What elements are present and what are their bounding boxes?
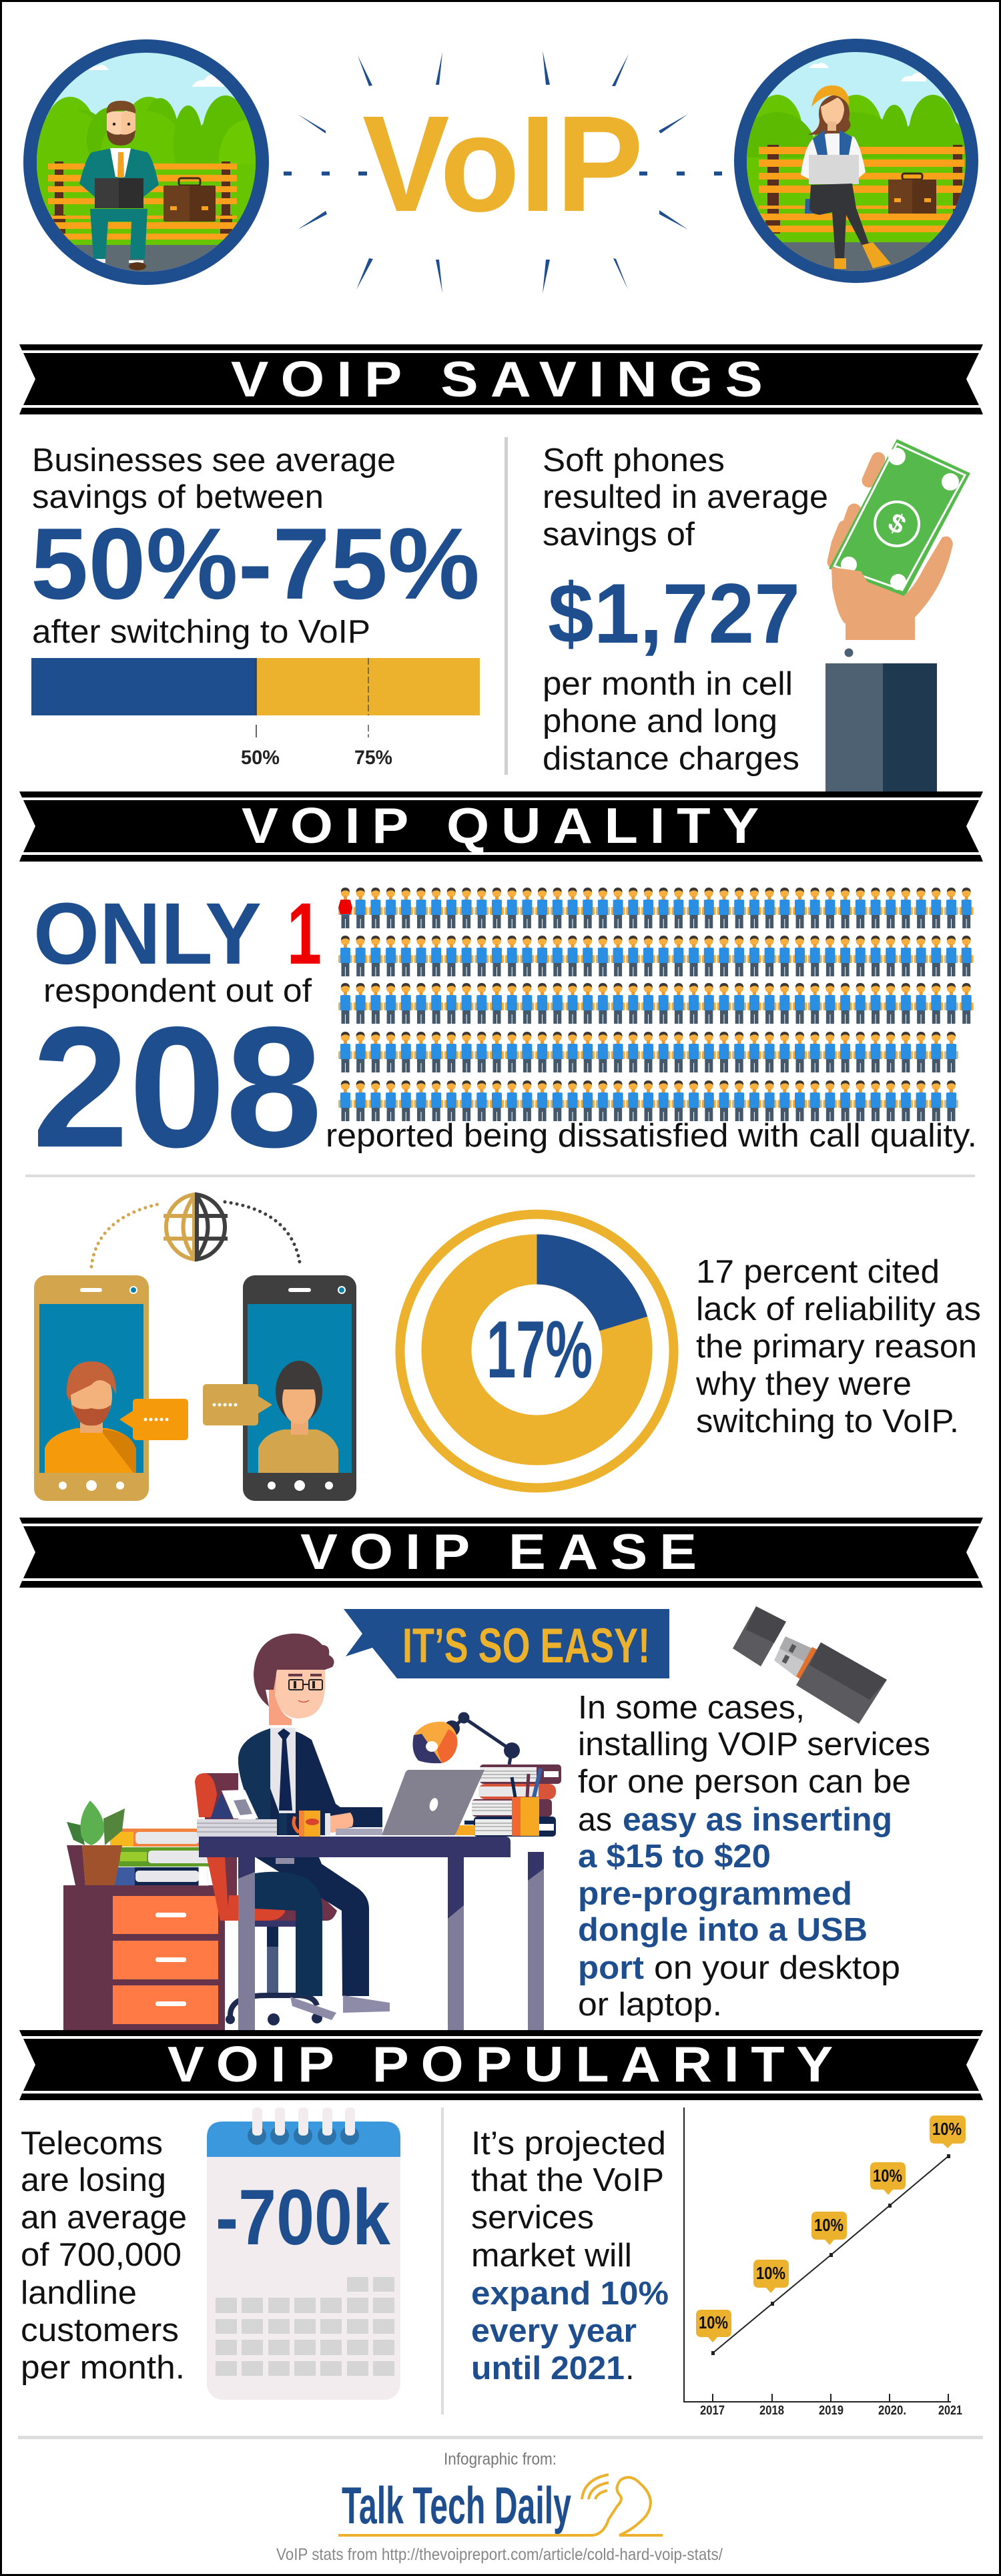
axis labels: 2019 — [819, 2404, 844, 2418]
axis labels: 2021 — [938, 2404, 962, 2418]
desk — [199, 1837, 544, 2030]
text block: installing VoIP: as — [578, 1802, 612, 1838]
icon: dotted arcs — [91, 1202, 300, 1267]
axis labels — [700, 2404, 962, 2418]
text block: reliability: 17 percent cited — [696, 1254, 940, 1290]
callouts: 10% — [696, 2116, 966, 2342]
text block: telecoms: Telecoms — [21, 2126, 163, 2162]
text block: per month — [543, 666, 799, 777]
text block: installing VoIP: installing VOIP services — [578, 1726, 930, 1762]
man — [238, 1634, 390, 2020]
text block: soft phones intro: Soft phones — [543, 442, 725, 478]
panel: savings percentage — [31, 442, 480, 769]
text block: telecoms: per month. — [21, 2350, 185, 2386]
pictogram: 208 respondents, one red — [338, 888, 974, 1121]
text block: businesses savings intro: Businesses see average — [32, 442, 396, 478]
heading: VoIP Quality — [19, 791, 983, 862]
line chart: 10% growth 2017-2021: 10% — [814, 2215, 844, 2235]
text block: telecoms: of 700,000 — [21, 2237, 182, 2273]
text block: telecoms: landline — [21, 2275, 137, 2311]
text block: soft phones intro — [543, 442, 828, 553]
text block: installing VoIP: dongle into a USB — [578, 1912, 868, 1948]
text block: reliability: switching to VoIP. — [696, 1403, 959, 1439]
heading: VoIP Popularity: VOIP POPULARITY — [168, 2036, 845, 2092]
icon: hand holding money — [825, 439, 970, 791]
text block: projection — [471, 2126, 669, 2386]
heading: VoIP Savings — [19, 344, 983, 414]
text block: projection: market will — [471, 2238, 632, 2274]
header — [20, 37, 984, 294]
text block: reliability: the primary reason — [696, 1329, 977, 1365]
text: respondent out of: respondent out of — [43, 973, 312, 1009]
text block: installing VoIP: port — [578, 1950, 644, 1986]
logo: Talk Tech Daily: Talk Tech Daily — [342, 2476, 571, 2535]
icon: woman on bench medallion — [731, 37, 984, 289]
line chart: 10% growth 2017-2021: 10% — [873, 2166, 902, 2186]
icon: man on bench medallion — [20, 39, 275, 292]
text block: installing VoIP: In some cases, — [578, 1690, 805, 1726]
icon: globe — [163, 1195, 228, 1259]
books — [110, 1829, 211, 1885]
desk items — [197, 1712, 561, 1837]
text block: soft phones intro: resulted in average — [543, 479, 828, 515]
plant — [67, 1801, 125, 1885]
burst rays — [284, 51, 722, 294]
text block: projection: every year — [471, 2313, 637, 2349]
text block: installing VoIP — [578, 1690, 930, 2023]
text block: installing VoIP: pre-programmed — [578, 1876, 852, 1912]
big text: only 1: ONLY — [33, 884, 262, 982]
text block: projection: It’s projected — [471, 2126, 666, 2162]
text block: telecoms: an average — [21, 2200, 187, 2236]
text block: reliability: lack of reliability as — [696, 1291, 981, 1327]
bar chart: savings range: 75% — [354, 747, 392, 769]
text block: installing VoIP: for one person can be — [578, 1764, 911, 1800]
icon: right phone — [243, 1275, 356, 1501]
heading: VoIP Quality: VOIP QUALITY — [242, 797, 771, 854]
big text: only 1: 1 — [287, 884, 322, 982]
text: source: VoIP stats from http://thevoipreport.com/article/cold-hard-voip-stats/ — [276, 2545, 723, 2564]
panel: call quality stat — [32, 884, 977, 1183]
big number: 208: 208 — [32, 990, 322, 1183]
heading: VoIP Savings: VOIP SAVINGS — [231, 351, 775, 407]
icon: left phone — [34, 1275, 149, 1501]
line chart: 10% growth 2017-2021: 10% — [756, 2263, 785, 2283]
bar chart: savings range: 50% — [241, 747, 280, 769]
big number: $1,727: $1,727 — [548, 566, 800, 661]
text block: reliability — [695, 1254, 981, 1439]
text block: soft phones intro: savings of — [543, 517, 695, 553]
line chart: 10% growth 2017-2021: 10% — [932, 2119, 962, 2139]
axis labels: 2018 — [759, 2404, 784, 2418]
bar chart: savings range — [31, 658, 480, 769]
panel: reliability — [34, 1195, 981, 1501]
text block: per month: phone and long — [543, 703, 777, 739]
panel: landline losses — [21, 2108, 400, 2400]
panel: market projection — [471, 2108, 966, 2418]
text block: telecoms: are losing — [21, 2162, 166, 2198]
icon: two phones connected by globe — [34, 1195, 356, 1501]
text block: projection: services — [471, 2200, 594, 2236]
icon: calendar with -700k: -700k — [216, 2174, 390, 2262]
heading: VoIP Popularity — [19, 2030, 983, 2100]
donut chart: 17%: 17% — [486, 1304, 593, 1395]
text block: projection: . — [625, 2350, 635, 2386]
text block: installing VoIP: easy as inserting — [623, 1802, 892, 1838]
text block: projection: expand 10% — [471, 2276, 669, 2312]
illustration: man at desk — [63, 1634, 561, 2030]
text block: per month: per month in cell — [543, 666, 793, 702]
footer — [276, 2450, 723, 2564]
text block: installing VoIP: or laptop. — [578, 1987, 722, 2023]
panel: ease of install — [63, 1606, 930, 2030]
text: reported being dissatisfied: reported being dissatisfied with call quality. — [326, 1118, 977, 1154]
text block: per month: distance charges — [543, 741, 799, 777]
chair — [195, 1773, 337, 2025]
text block: businesses savings intro — [32, 442, 396, 515]
line chart: 10% growth 2017-2021 — [684, 2108, 966, 2418]
text block: telecoms: customers — [21, 2312, 179, 2348]
icon: chat bubbles — [119, 1384, 272, 1440]
line chart: 10% growth 2017-2021: 10% — [699, 2312, 728, 2332]
title: VoIP — [362, 87, 643, 240]
icon: calendar with -700k — [207, 2108, 400, 2400]
text block: projection: that the VoIP — [471, 2162, 664, 2198]
text block: projection: until 2021 — [471, 2350, 625, 2386]
text block: telecoms — [21, 2126, 187, 2386]
text block: installing VoIP: a $15 to $20 — [578, 1839, 771, 1875]
heading: VoIP Ease — [19, 1518, 983, 1588]
text: infographic from: Infographic from: — [444, 2450, 557, 2469]
heading: VoIP Ease: VOIP EASE — [300, 1524, 709, 1580]
donut chart: 17% — [400, 1215, 674, 1488]
icon: hand holding money: $ — [884, 507, 910, 541]
icon: USB dongle — [733, 1606, 887, 1724]
speech bubble: it's so easy: IT’S SO EASY! — [402, 1619, 650, 1673]
text block: reliability: why they were — [695, 1366, 912, 1402]
panel: soft phone savings — [543, 439, 970, 791]
cabinet — [63, 1885, 225, 2030]
axis labels: 2020. — [878, 2404, 906, 2418]
big number: 50%-75%: 50%-75% — [31, 507, 480, 621]
speech bubble: it's so easy — [344, 1609, 669, 1678]
text: after switching: after switching to VoIP — [32, 614, 370, 650]
axis labels: 2017 — [700, 2404, 725, 2418]
text block: installing VoIP: on your desktop — [654, 1950, 900, 1986]
text block: businesses savings intro: savings of between — [32, 479, 324, 515]
